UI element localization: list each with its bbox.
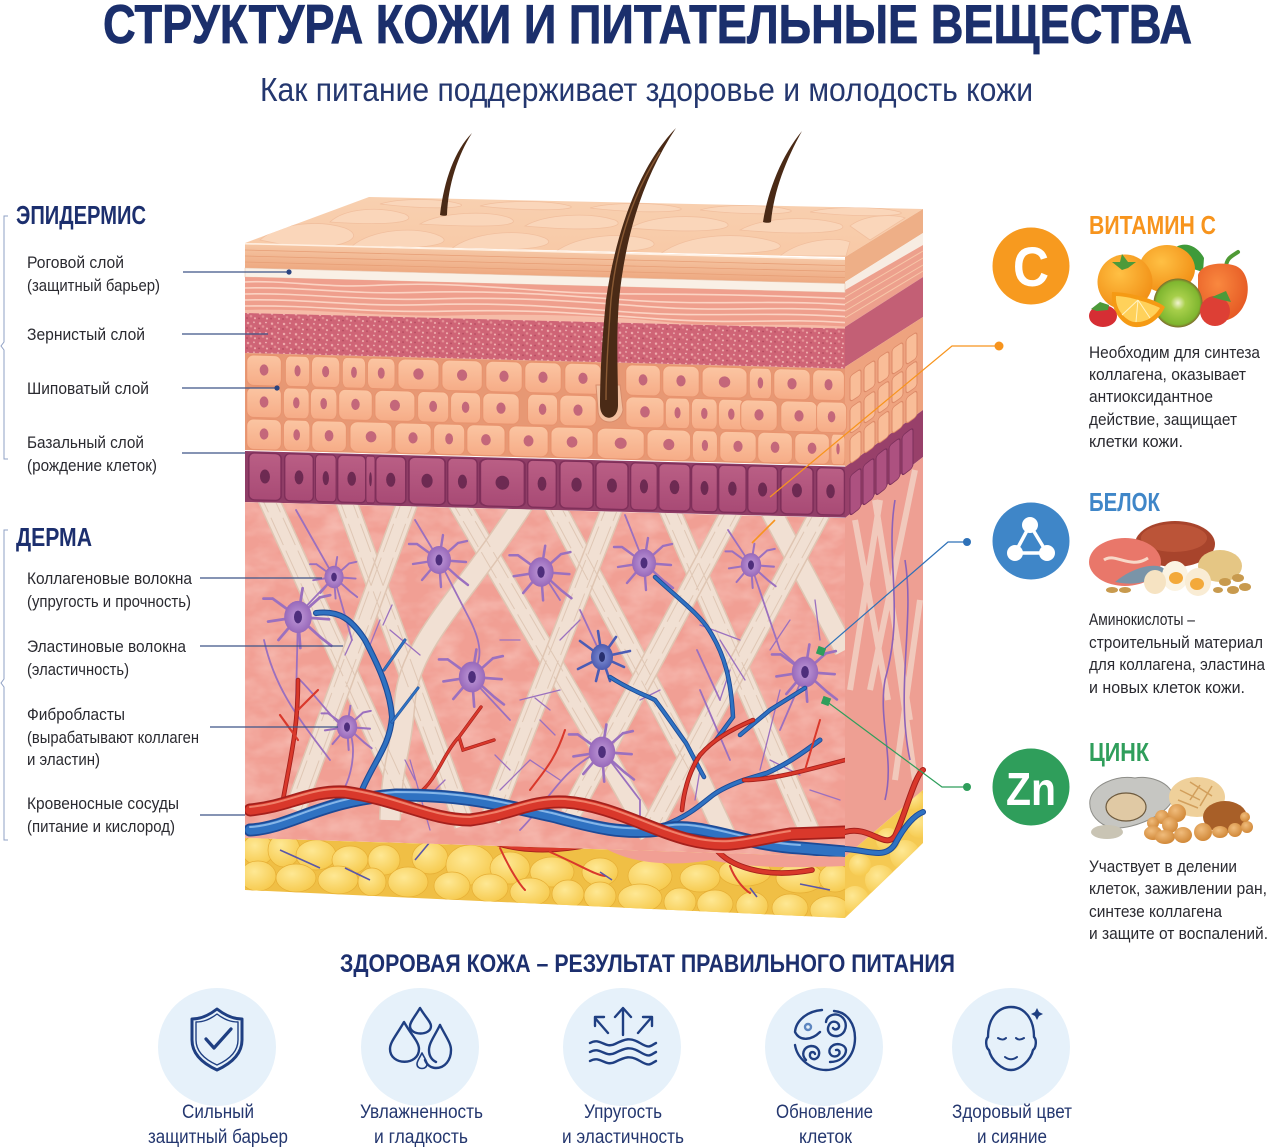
- benefit: barrier: Сильный: [182, 1102, 254, 1123]
- text: zinc description: [1089, 857, 1268, 943]
- text: protein description: Аминокислоты –: [1089, 610, 1195, 629]
- label: stratum corneum: [27, 253, 292, 295]
- label: elastin: [27, 637, 343, 679]
- hair: left: [440, 133, 472, 216]
- hair: central with follicle: [596, 128, 676, 422]
- label: collagen: [27, 569, 322, 611]
- benefit: barrier: защитный барьер: [148, 1127, 288, 1148]
- text: vitamin C description: коллагена, оказывает: [1089, 365, 1246, 384]
- label: blood vessels: Кровеносные сосуды: [27, 794, 179, 813]
- basal layer cells: [245, 451, 845, 518]
- subtitle: Как питание поддерживает здоровье и молодость кожи: [260, 71, 1033, 108]
- text: vitamin C description: антиоксидантное: [1089, 387, 1213, 406]
- benefit: elasticity: и эластичность: [562, 1127, 684, 1148]
- heading: benefits: ЗДОРОВАЯ КОЖА – РЕЗУЛЬТАТ ПРАВИЛЬНОГО ПИТАНИЯ: [340, 950, 955, 978]
- heading: protein: БЕЛОК: [1089, 487, 1160, 517]
- text: protein description: [1089, 610, 1265, 697]
- label: blood vessels: [27, 794, 245, 836]
- label: spinous: [27, 379, 280, 398]
- icon: fruits: [1089, 245, 1248, 328]
- label: elastin: Эластиновые волокна: [27, 637, 186, 656]
- fibroblast cells: [264, 535, 837, 782]
- subcutaneous fat layer: [245, 838, 845, 918]
- icon: vitamin C badge: C: [1013, 235, 1049, 298]
- heading: dermis: ДЕРМА: [16, 522, 92, 552]
- benefit: healthy glow: Здоровый цвет: [952, 1102, 1072, 1123]
- section: benefits: [148, 950, 1072, 1148]
- icon: zinc badge: Zn: [1006, 763, 1056, 815]
- hair: right: [763, 131, 802, 223]
- dermis layer: [245, 485, 845, 862]
- benefit: elasticity: Упругость: [584, 1102, 662, 1123]
- granular layer: [245, 313, 845, 369]
- bracket dermis: [1, 530, 8, 840]
- benefit: cell renewal: [765, 988, 883, 1148]
- spinous layer cells: [245, 353, 847, 466]
- left labels: dermis: [1, 522, 343, 840]
- arrow: vitamin C: [752, 342, 1004, 543]
- top skin surface: [245, 197, 923, 257]
- fibroblast processes: [264, 510, 840, 830]
- callout leader lines: [752, 342, 1004, 791]
- surface skin band: [245, 243, 845, 284]
- icon: zinc badge: [992, 748, 1070, 826]
- main blue vein: [250, 792, 845, 852]
- panel: zinc: [992, 737, 1268, 943]
- icon: protein foods: [1089, 521, 1251, 596]
- label: basal: Базальный слой: [27, 433, 144, 452]
- label: basal: [27, 433, 245, 475]
- heading: epidermis: ЭПИДЕРМИС: [16, 200, 146, 230]
- benefit: hydration: и гладкость: [374, 1127, 468, 1148]
- text: vitamin C description: клетки кожи.: [1089, 432, 1183, 451]
- label: basal: (рождение клеток): [27, 456, 157, 475]
- text: vitamin C description: действие, защищает: [1089, 410, 1237, 429]
- label: fibroblasts: и эластин): [27, 750, 100, 769]
- label: collagen: (упругость и прочность): [27, 592, 191, 611]
- label: granular: Зернистый слой: [27, 325, 145, 344]
- heading: zinc: ЦИНК: [1089, 737, 1149, 767]
- label: fibroblasts: (вырабатывают коллаген: [27, 728, 199, 747]
- bracket epidermis: [1, 216, 8, 459]
- arrow: protein: [816, 538, 971, 656]
- label: elastin: (эластичность): [27, 660, 129, 679]
- right side face of block: [845, 209, 926, 918]
- label: fibroblasts: [27, 705, 338, 769]
- icon: protein badge: [992, 502, 1070, 580]
- panel: skin cross-section block: [240, 128, 933, 924]
- benefit: cell renewal: Обновление: [776, 1102, 873, 1123]
- benefit: healthy glow: и сияние: [977, 1127, 1047, 1148]
- text: protein description: и новых клеток кожи.: [1089, 678, 1245, 697]
- collagen fibers: [256, 485, 845, 845]
- label: blood vessels: (питание и кислород): [27, 817, 175, 836]
- text: zinc description: синтезе коллагена: [1089, 902, 1222, 921]
- left labels: epidermis: [1, 200, 292, 475]
- wavy stratum layer: [245, 277, 845, 330]
- benefit: hydration: [360, 988, 483, 1148]
- label: spinous: Шиповатый слой: [27, 379, 149, 398]
- text: zinc description: Участвует в делении: [1089, 857, 1237, 876]
- label: stratum corneum: (защитный барьер): [27, 276, 160, 295]
- label: stratum corneum: Роговой слой: [27, 253, 124, 272]
- hair shafts: [440, 128, 802, 422]
- text: vitamin C description: [1089, 343, 1260, 451]
- benefit: cell renewal: клеток: [799, 1127, 853, 1148]
- label: fibroblasts: Фибробласты: [27, 705, 125, 724]
- blood vessel branches: [280, 577, 845, 825]
- icon: zinc foods: [1090, 777, 1253, 844]
- stratum corneum white line: [245, 268, 845, 293]
- arrow: zinc: [821, 696, 971, 791]
- label: collagen: Коллагеновые волокна: [27, 569, 192, 588]
- main red artery: [250, 789, 845, 844]
- heading: vitamin C: ВИТАМИН С: [1089, 210, 1216, 240]
- icon: vitamin C badge: [992, 228, 1070, 304]
- benefit: hydration: Увлажненность: [360, 1102, 483, 1123]
- benefit: barrier: [148, 988, 288, 1148]
- panel: protein: [992, 487, 1265, 697]
- panel: vitamin C: [992, 210, 1260, 451]
- benefit: healthy glow: [952, 988, 1072, 1148]
- benefit: elasticity: [562, 988, 684, 1148]
- epidermis layers, sheared front face: [245, 243, 847, 518]
